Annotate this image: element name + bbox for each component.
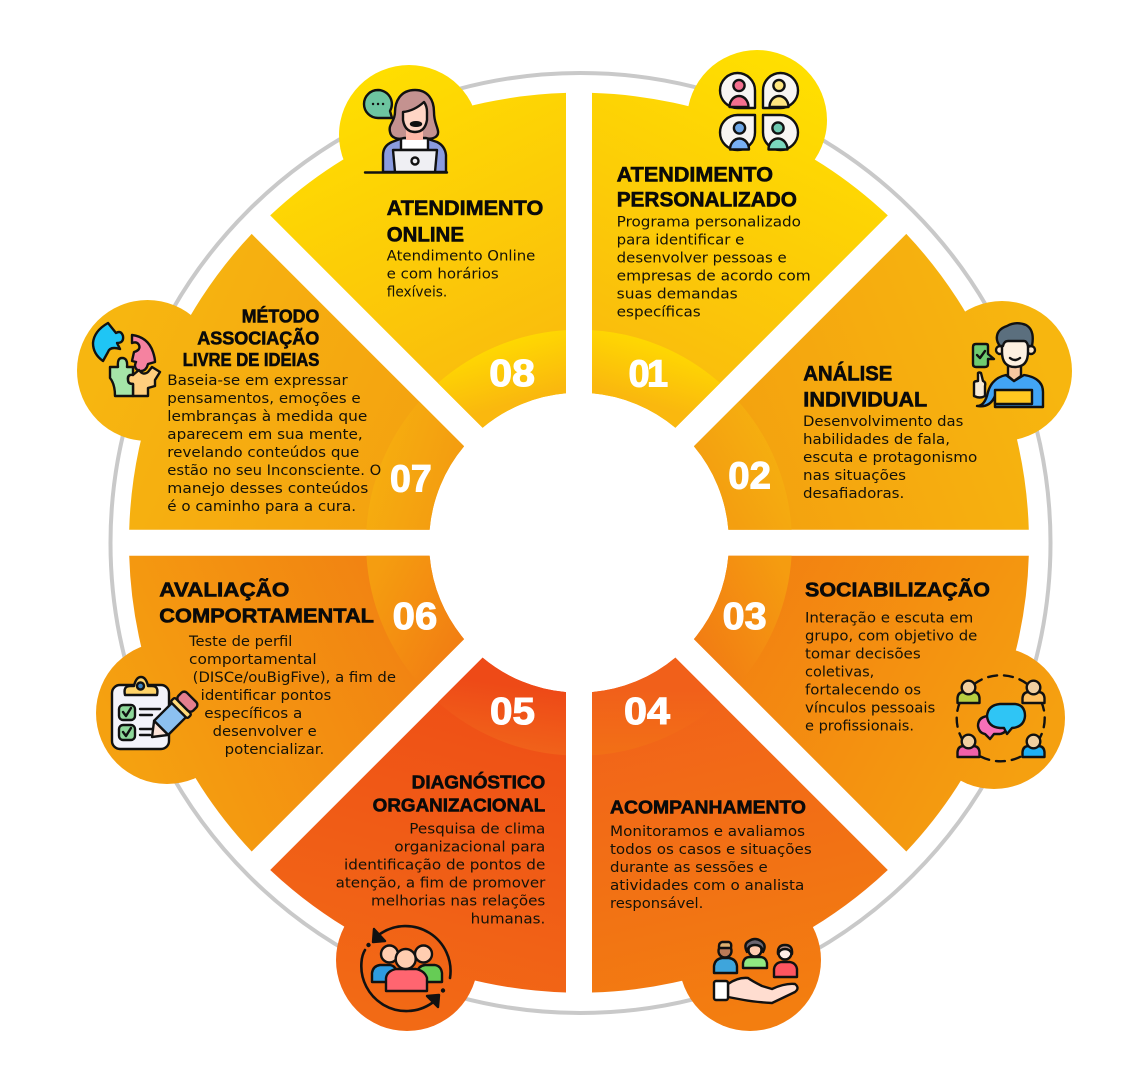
- text 07: aparecem em sua mente,: [167, 427, 363, 443]
- number 06: 06: [393, 596, 437, 638]
- heading 02: ANÁLISE: [803, 363, 892, 386]
- text 06: Teste de perfil: [188, 634, 292, 650]
- panel: 01 atendimento personalizado: [592, 50, 888, 428]
- icon: team with cycle arrows: [361, 926, 451, 1011]
- text 07: lembranças à medida que: [167, 409, 367, 425]
- text 06: comportamental: [189, 652, 317, 668]
- text 02: desafiadoras.: [803, 486, 904, 502]
- heading 05: [373, 771, 545, 816]
- inner ring 04: [592, 658, 720, 755]
- text 05: atenção, a fim de promover: [336, 875, 545, 891]
- panel: 05 diagnostico organizacional: [270, 658, 566, 1031]
- text 08: flexíveis.: [387, 285, 447, 301]
- inner ring 03: [694, 556, 792, 684]
- text 02: habilidades de fala,: [803, 432, 950, 448]
- heading 05: DIAGNÓSTICO: [412, 771, 545, 792]
- heading 07: LIVRE DE IDEIAS: [183, 349, 319, 370]
- heading 08: [387, 197, 543, 247]
- heading 07: [183, 306, 319, 370]
- icon: man with thumb up: [973, 323, 1043, 407]
- text 05: humanas.: [471, 911, 545, 927]
- text 05: organizacional para: [394, 839, 545, 855]
- text 01: empresas de acordo com: [617, 269, 811, 285]
- icon: people over open hand: [714, 939, 798, 1003]
- icon: clipboard and pencil: [112, 677, 200, 749]
- text 02: [803, 414, 977, 502]
- text 05: Pesquisa de clima: [409, 821, 545, 837]
- text 07: Baseia-se em expressar: [167, 373, 348, 389]
- number 08: 08: [489, 353, 535, 395]
- heading 07: MÉTODO: [242, 306, 319, 327]
- icon: woman with headset and laptop: [364, 90, 447, 172]
- text 07: pensamentos, emoções e: [167, 391, 361, 407]
- text 01: para identificar e: [617, 233, 744, 249]
- wedge 01: [592, 50, 888, 428]
- inner ring 06: [366, 556, 464, 684]
- text 02: nas situações: [803, 468, 906, 484]
- inner ring 07: [366, 402, 464, 530]
- text 01: específicas: [617, 305, 701, 321]
- text 06: específicos a: [204, 706, 302, 722]
- heading 03: SOCIABILIZAÇÃO: [805, 579, 990, 602]
- text 07: [167, 373, 381, 515]
- wedge 07: [77, 234, 464, 530]
- text 03: [805, 610, 977, 734]
- heading 06: COMPORTAMENTAL: [159, 606, 374, 628]
- wedge 05: [270, 658, 566, 1031]
- text 03: coletivas,: [805, 664, 874, 680]
- text 08: [387, 249, 535, 301]
- wedge 08: [270, 65, 566, 428]
- inner ring 01: [592, 330, 720, 428]
- text 06: potencializar.: [225, 742, 324, 758]
- text 03: e profissionais.: [805, 718, 914, 734]
- text 03: Interação e escuta em: [805, 610, 973, 626]
- text 01: desenvolver pessoas e: [617, 251, 787, 267]
- heading 02: INDIVIDUAL: [803, 389, 927, 412]
- icon: four people tiles: [720, 73, 798, 150]
- text 01: Programa personalizado: [617, 215, 801, 231]
- text 04: Monitoramos e avaliamos: [610, 824, 805, 840]
- text 07: estão no seu Inconsciente. O: [167, 463, 381, 479]
- number 02: 02: [728, 455, 771, 497]
- icon: puzzle head: [93, 323, 160, 396]
- text 03: fortalecendo os: [805, 682, 921, 698]
- inner ring 05: [438, 658, 566, 755]
- text 06: (DISCe/ouBigFive), a fim de: [193, 670, 396, 686]
- text 01: [617, 215, 811, 321]
- text 07: é o caminho para a cura.: [167, 499, 356, 515]
- outer gray ring: [110, 73, 1050, 1013]
- number 07: 07: [390, 459, 432, 501]
- number 04: 04: [624, 691, 670, 733]
- text 04: durante as sessões e: [610, 860, 768, 876]
- heading 01: PERSONALIZADO: [617, 189, 797, 212]
- text 03: grupo, com objetivo de: [805, 628, 977, 644]
- text 03: vínculos pessoais: [805, 700, 935, 716]
- number 05: 05: [490, 691, 535, 733]
- text 06: desenvolver e: [213, 724, 317, 740]
- text 01: suas demandas: [617, 287, 738, 303]
- text 03: tomar decisões: [805, 646, 921, 662]
- text 06: [188, 634, 396, 758]
- text 04: responsável.: [610, 896, 703, 912]
- text 05: melhorias nas relações: [371, 893, 545, 909]
- text 05: [336, 821, 545, 927]
- panel: 07 metodo associacao livre de ideias: [77, 234, 464, 530]
- text 08: Atendimento Online: [387, 249, 535, 265]
- heading 08: ATENDIMENTO: [387, 197, 543, 220]
- panel: 04 acompanhamento: [592, 658, 888, 1031]
- inner ring 02: [694, 402, 792, 530]
- text 04: [610, 824, 812, 912]
- panel: 06 avaliacao comportamental: [96, 556, 464, 852]
- text 04: atividades com o analista: [610, 878, 804, 894]
- text 07: manejo desses conteúdos: [167, 481, 368, 497]
- heading 01: ATENDIMENTO: [617, 164, 773, 187]
- panel: 03 sociabilizacao: [694, 556, 1065, 852]
- text 06: identificar pontos: [201, 688, 331, 704]
- wedge 06: [96, 556, 464, 852]
- heading 06: [159, 579, 374, 628]
- panel: 08 atendimento online: [270, 65, 566, 428]
- text 02: escuta e protagonismo: [803, 450, 977, 466]
- wedge 03: [694, 556, 1065, 852]
- wedge 02: [694, 234, 1072, 530]
- heading 06: AVALIAÇÃO: [159, 579, 289, 602]
- text 05: identificação de pontos de: [344, 857, 545, 873]
- panel: 02 analise individual: [694, 234, 1072, 530]
- heading 02: [803, 363, 927, 412]
- text 07: revelando conteúdos que: [167, 445, 359, 461]
- inner ring 08: [438, 330, 566, 428]
- wedge 04: [592, 658, 888, 1031]
- heading 05: ORGANIZACIONAL: [373, 795, 545, 816]
- icon: group conversation: [957, 675, 1045, 761]
- heading 01: [617, 164, 797, 212]
- heading 04: ACOMPANHAMENTO: [610, 796, 806, 817]
- text 02: Desenvolvimento das: [803, 414, 963, 430]
- number 01: 01: [628, 354, 668, 396]
- number 03: 03: [723, 596, 767, 638]
- text 08: e com horários: [387, 267, 499, 283]
- text 04: todos os casos e situações: [610, 842, 812, 858]
- heading 08: ONLINE: [387, 224, 464, 247]
- heading 07: ASSOCIAÇÃO: [197, 328, 319, 348]
